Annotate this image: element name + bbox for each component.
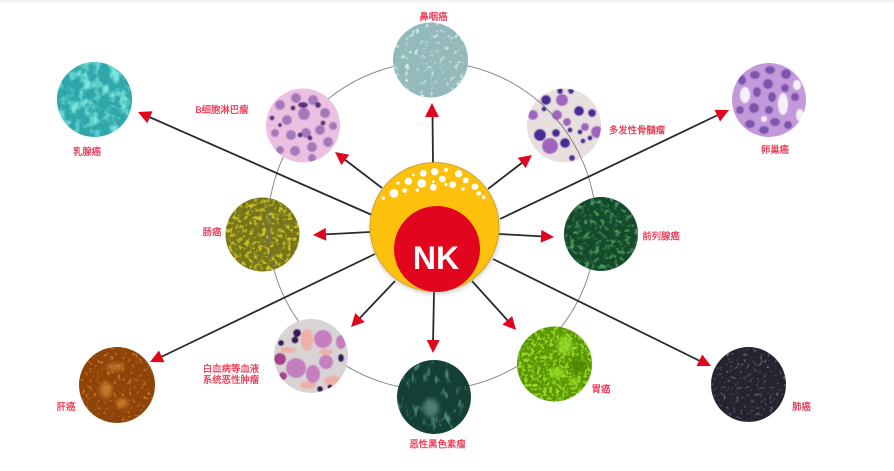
cell: prostate cancer [564,197,638,271]
cell: breast cancer [57,62,132,137]
cell: lung cancer [711,347,786,422]
ring segments visible over cells [268,100,582,270]
cell: nasopharyngeal carcinoma [393,22,468,98]
cell: B-cell lymphoma [266,88,340,162]
orbit ring [268,62,596,390]
arrow: to leukemia [346,281,395,331]
label: prostate: 前列腺癌 [642,230,680,242]
label: B-cell lymphoma: B细胞淋巴瘤 [195,104,249,115]
cell: intestinal cancer [226,198,300,272]
label: melanoma: 恶性黑色素瘤 [409,438,466,450]
arrow: to multiple myeloma [488,150,536,189]
label: stomach: 胃癌 [592,384,610,394]
cell: liver cancer [79,347,155,423]
red nucleus [394,206,480,292]
arrow: to lung [493,259,714,372]
arrow: to ovarian [500,104,732,219]
label: intestinal: 肠癌 [203,226,221,238]
arrows radiating from NK cell [135,103,732,372]
arrow: to intestinal [313,228,370,241]
arrow: to liver [147,254,375,368]
label: multiple myeloma: 多发性骨髓瘤 [609,124,666,136]
arrow: to melanoma [427,292,440,353]
cell: melanoma [397,360,471,434]
NK label: NK [413,240,459,276]
arrow: to nasopharyngeal [425,103,439,163]
label: leukemia and blood cancers: 白血病等血液 [203,363,259,374]
cell: leukemia [274,319,348,393]
label: ovarian: 卵巢癌 [761,144,789,155]
cell: ovarian cancer [732,63,806,137]
cell: stomach cancer [517,326,592,402]
cell: multiple myeloma [527,88,601,162]
label: leukemia and blood cancers: 系统恶性肿瘤 [203,374,260,385]
arrow: to B-cell lymphoma [331,147,382,188]
label: lung: 肺癌 [792,401,811,412]
label: liver: 肝癌 [57,401,75,412]
NK cell centre [370,162,500,294]
white granules [382,168,485,200]
yellow cell body [370,162,499,292]
label: nasopharyngeal: 鼻咽癌 [419,11,448,22]
arrow: to prostate [499,230,554,243]
arrow: to breast [135,106,372,215]
label: breast: 乳腺癌 [73,146,101,157]
arrow: to stomach [472,281,521,334]
